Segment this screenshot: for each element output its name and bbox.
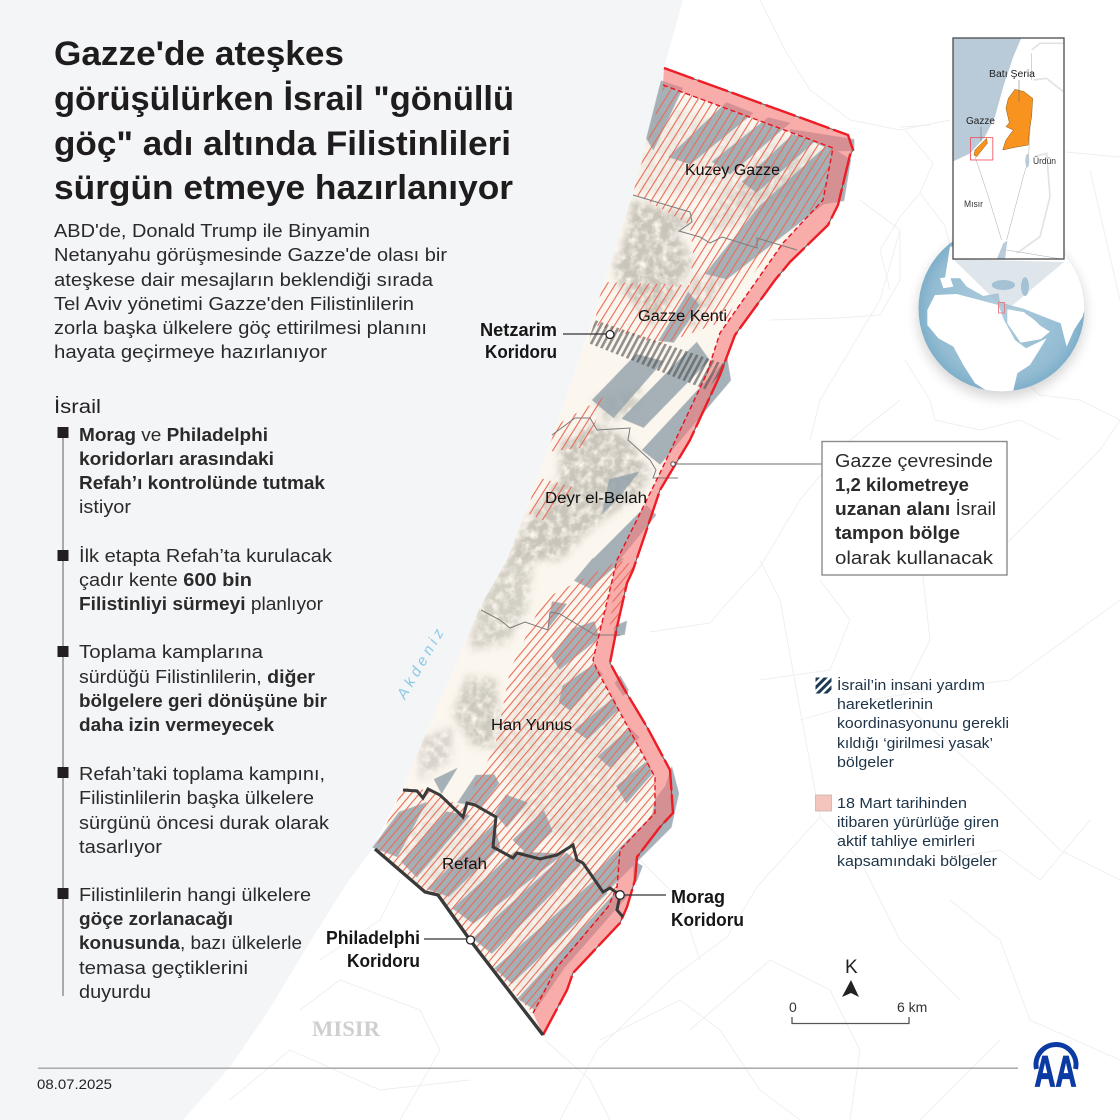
bullet 5: göçe zorlanacağı <box>79 909 233 929</box>
bullet 4: Refah’taki toplama kampını, <box>79 764 325 784</box>
intro paragraph: ateşkese dair mesajların beklendiği sırada <box>54 270 434 290</box>
legend: no-go zones: İsrail’in insani yardım <box>837 676 985 694</box>
bullet 1: Refah’ı kontrolünde tutmak <box>79 473 326 493</box>
bullet 2: Filistinliyi sürmeyi planlıyor <box>79 594 323 614</box>
bullet 5: temasa geçtiklerini <box>79 958 248 978</box>
place labels <box>442 162 780 873</box>
map: Gaza strip <box>375 68 853 1035</box>
governorate boundaries <box>481 195 797 635</box>
title: sürgün etmeye hazırlanıyor <box>54 169 513 207</box>
place labels: Han Yunus <box>491 717 572 734</box>
callout: buffer zone: uzanan alanı İsrail <box>835 499 996 519</box>
bullet 3 <box>58 642 327 735</box>
footer rule <box>38 1068 1018 1069</box>
north arrow <box>842 957 859 997</box>
sea panel <box>0 0 683 1120</box>
title: Gazze'de ateşkes <box>54 35 344 73</box>
legend: evacuation zones: kapsamındaki bölgeler <box>837 853 997 870</box>
date: 08.07.2025 <box>37 1076 112 1092</box>
legend: evacuation zones <box>816 795 999 870</box>
legend: evacuation zones: 18 Mart tarihinden <box>837 795 967 812</box>
bullet 1: istiyor <box>79 497 131 517</box>
logo: AA: AA <box>1034 1047 1076 1096</box>
callout: buffer zone: 1,2 kilometreye <box>835 475 969 495</box>
callout: Philadelphi <box>326 928 474 971</box>
land <box>375 68 853 1035</box>
intro paragraph: zorla başka ülkelere göç ettirilmesi planını <box>54 318 427 338</box>
callout: Netzarim <box>480 320 614 362</box>
buffer zone <box>533 68 853 1035</box>
intro paragraph: ABD'de, Donald Trump ile Binyamin <box>54 221 370 241</box>
callout: buffer zone <box>671 442 1007 575</box>
callout: Netzarim: Koridoru <box>485 342 557 362</box>
scale bar: 0 <box>789 999 797 1015</box>
bullet 4: Filistinlilerin başka ülkelere <box>79 788 314 808</box>
inset map: Batı Şeria <box>989 69 1035 80</box>
north arrow: K <box>845 957 858 978</box>
legend: no-go zones: koordinasyonunu gerekli <box>837 715 1009 732</box>
place labels: Kuzey Gazze <box>685 162 780 179</box>
intro paragraph: Tel Aviv yönetimi Gazze'den Filistinlilerin <box>54 294 414 314</box>
callout: Philadelphi: Koridoru <box>347 951 420 971</box>
bullet 5 <box>58 885 311 1002</box>
bullet 4: sürgünü öncesi durak olarak <box>79 813 330 833</box>
legend: no-go zones: bölgeler <box>837 754 894 771</box>
no-go zones: grey bands <box>375 82 853 1008</box>
inset map: Mısır <box>964 199 983 209</box>
timeline rail <box>62 430 64 996</box>
place labels: Refah <box>442 856 487 873</box>
bullet 4 <box>58 764 330 857</box>
title: göç" adı altında Filistinlileri <box>54 125 511 163</box>
inset map: Gazze <box>966 116 995 127</box>
legend: no-go zones <box>816 676 1009 771</box>
callout: buffer zone: tampon bölge <box>835 523 960 543</box>
intro paragraph: Netanyahu görüşmesinde Gazze'de olası bir <box>54 245 447 265</box>
Philadelphi corridor line <box>375 849 543 1035</box>
bullet 4: tasarlıyor <box>79 837 162 857</box>
bullet 5: duyurdu <box>79 982 151 1002</box>
bullet 2: İlk etapta Refah’ta kurulacak <box>79 546 333 566</box>
callout: buffer zone: Gazze çevresinde <box>835 451 993 471</box>
bullet 3: sürdüğü Filistinlilerin, diğer <box>79 667 315 687</box>
bullet 1: Morag ve Philadelphi <box>79 425 268 445</box>
inset map: Ürdün <box>1033 156 1056 167</box>
intro paragraph <box>54 221 447 362</box>
callout: Morag: Morag <box>671 887 725 907</box>
callout: Morag <box>616 887 744 930</box>
Gaza <box>974 138 987 157</box>
inset map <box>953 37 1064 259</box>
eastern and northern border <box>533 68 853 1035</box>
callout: buffer zone: olarak kullanacak <box>835 548 994 568</box>
legend: no-go zones: hareketlerinin <box>837 696 933 713</box>
heading: İsrail: İsrail <box>54 397 101 418</box>
logo: AA <box>1034 1045 1076 1096</box>
bullet 1 <box>58 425 326 517</box>
callout: Morag: Koridoru <box>671 910 744 930</box>
scale bar: 6 km <box>897 999 927 1015</box>
West Bank <box>1003 89 1033 150</box>
bullet 3: Toplama kamplarına <box>79 642 264 662</box>
title: görüşülürken İsrail "gönüllü <box>54 80 514 118</box>
callout: Philadelphi: Philadelphi <box>326 928 420 948</box>
label: Akdeniz: Akdeniz <box>393 626 448 703</box>
sea <box>953 37 1022 162</box>
bullet 3: bölgelere geri dönüşüne bir <box>79 691 327 711</box>
globe <box>918 226 1088 398</box>
legend: evacuation zones: aktif tahliye emirleri <box>837 833 975 850</box>
bullet 5: Filistinlilerin hangi ülkelere <box>79 885 311 905</box>
legend: no-go zones: kıldığı ‘girilmesi yasak’ <box>837 735 993 752</box>
Netzarim corridor <box>588 320 727 390</box>
intro paragraph: hayata geçirmeye hazırlanıyor <box>54 342 327 362</box>
scale bar <box>789 999 927 1024</box>
callout: Netzarim: Netzarim <box>480 320 557 340</box>
place labels: Deyr el-Belah <box>545 490 647 507</box>
legend: evacuation zones: itibaren yürürlüğe giren <box>837 814 999 831</box>
evacuation hatch <box>375 85 833 1013</box>
bullet 1: koridorları arasındaki <box>79 449 274 469</box>
title <box>54 35 514 207</box>
bullet 3: daha izin vermeyecek <box>79 715 275 735</box>
place labels: Gazze Kenti <box>638 308 727 325</box>
Morag corridor line <box>403 789 623 917</box>
label: MISIR: MISIR <box>312 1016 381 1041</box>
bullet 2: çadır kente 600 bin <box>79 570 252 590</box>
bullet 2 <box>58 546 333 614</box>
urban areas <box>387 103 827 993</box>
bullet 5: konusunda , bazı ülkelerle <box>79 933 302 953</box>
